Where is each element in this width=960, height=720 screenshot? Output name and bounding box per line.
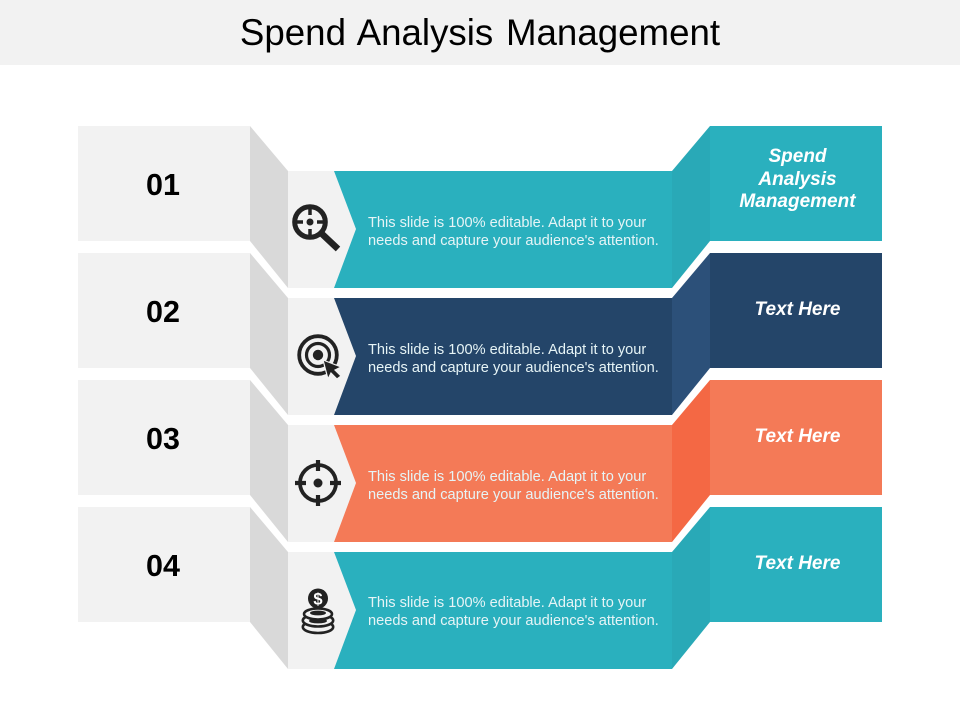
number panel 01: 01 <box>146 168 180 202</box>
heading: Spend Analysis Management: Management <box>739 191 856 212</box>
icon: crosshair <box>295 460 341 506</box>
number panel 02: 02 <box>146 295 180 329</box>
number panel 04 <box>78 507 356 669</box>
number panel 01 <box>78 126 356 288</box>
row 4 <box>78 507 882 669</box>
ribbon 1 <box>334 126 882 288</box>
number panel 03 <box>78 380 356 542</box>
description 3: This slide is 100% editable. Adapt it to your <box>368 469 646 485</box>
description 2: This slide is 100% editable. Adapt it to your <box>368 342 646 358</box>
heading: Text Here: Text Here <box>755 299 841 320</box>
row 1 <box>78 126 882 288</box>
heading: Text Here: Text Here <box>755 426 841 447</box>
description 4: This slide is 100% editable. Adapt it to your <box>368 595 646 611</box>
heading: Spend Analysis Management: Spend <box>768 146 827 167</box>
icon: dollar coin stack <box>303 588 333 633</box>
ribbon 2 <box>334 253 882 415</box>
icon: target with cursor <box>299 336 341 379</box>
ribbon 4 <box>334 507 882 669</box>
number panel 02 <box>78 253 356 415</box>
ribbon 3 <box>334 380 882 542</box>
title: Spend Analysis Management <box>240 12 720 53</box>
heading: Text Here: Text Here <box>755 553 841 574</box>
number panel 03: 03 <box>146 422 180 456</box>
description 3: needs and capture your audience's attention. <box>368 487 659 503</box>
heading: Spend Analysis Management: Analysis <box>757 169 837 190</box>
icon: magnifier with crosshair <box>295 207 338 249</box>
icon: dollar coin stack: $ <box>313 590 323 608</box>
description 1: needs and capture your audience's attention. <box>368 233 659 249</box>
row 3 <box>78 380 882 542</box>
description 2: needs and capture your audience's attention. <box>368 360 659 376</box>
description 4: needs and capture your audience's attention. <box>368 613 659 629</box>
title <box>0 0 960 65</box>
number panel 04: 04 <box>146 549 180 583</box>
row 2 <box>78 253 882 415</box>
description 1: This slide is 100% editable. Adapt it to your <box>368 215 646 231</box>
